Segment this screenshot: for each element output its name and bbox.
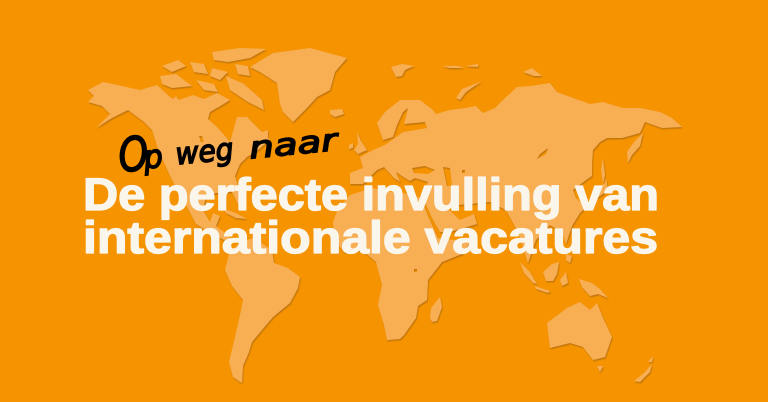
Tasmania and New Zealand xyxy=(597,356,653,382)
Arctic islands xyxy=(160,48,266,110)
Svalbard and Arctic Russia xyxy=(391,64,542,100)
Britain and Ireland xyxy=(349,132,367,154)
Greenland xyxy=(250,48,347,122)
title line 2: internationale vacatures xyxy=(83,212,658,263)
Indonesia: Borneo xyxy=(543,262,559,281)
Cuba and Caribbean xyxy=(224,209,247,219)
continent: North America xyxy=(88,82,270,241)
handwritten subtitle: p xyxy=(141,137,164,177)
world map xyxy=(88,48,682,383)
title xyxy=(83,169,659,263)
Indonesia: Sumatra and Java xyxy=(520,262,550,293)
Newfoundland and Iceland xyxy=(262,109,344,138)
handwritten subtitle: naar xyxy=(248,123,341,166)
handwritten subtitle: O xyxy=(116,126,151,184)
Kamchatka and Sakhalin xyxy=(601,133,643,184)
handwritten subtitle xyxy=(116,108,341,184)
Sulawesi and Philippines xyxy=(560,254,572,286)
handwritten subtitle: weg xyxy=(174,132,235,173)
continent: South America xyxy=(225,238,300,383)
continent: Africa xyxy=(333,188,472,340)
continent: Eurasia xyxy=(350,83,682,263)
Madagascar xyxy=(430,297,442,322)
New Guinea xyxy=(579,279,608,298)
title line 1: De perfecte invulling van xyxy=(83,169,659,220)
Australia xyxy=(547,302,612,360)
Japan xyxy=(590,178,608,200)
